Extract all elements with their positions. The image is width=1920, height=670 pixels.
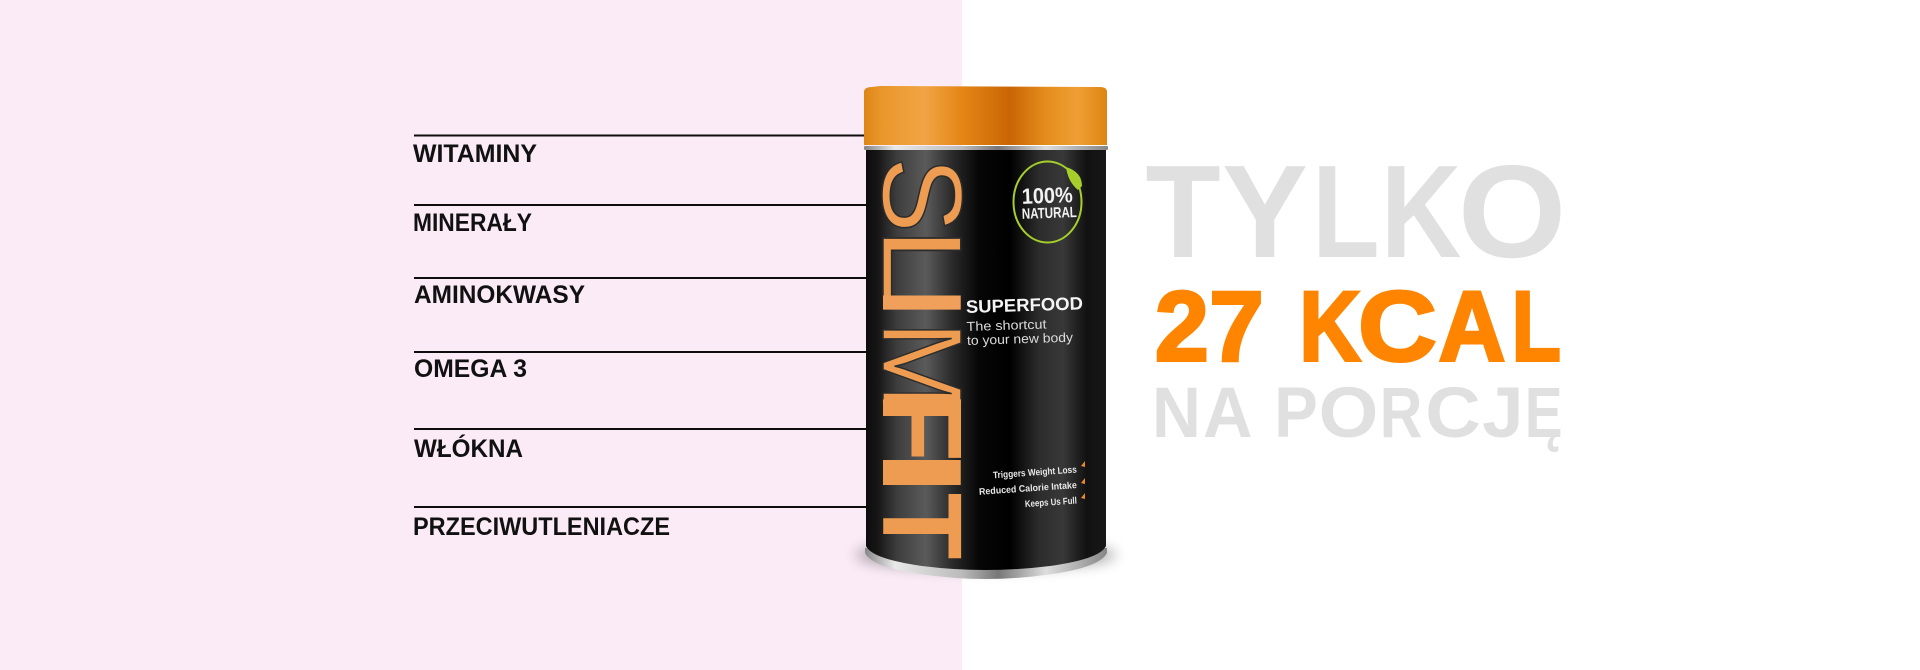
na porcję: A xyxy=(1203,374,1251,453)
na porcję: R xyxy=(1380,374,1422,453)
logo: slimfit: I xyxy=(859,282,985,324)
label: przeciwutleniacze: PRZECIWUTLENIACZE xyxy=(413,513,670,541)
benefits list xyxy=(979,461,1085,510)
27 kcal: 7 xyxy=(1209,270,1264,382)
logo: slimfit: I xyxy=(859,448,985,497)
badge: 100% natural: 100% xyxy=(1021,182,1073,209)
benefits list: Reduced Calorie Intake xyxy=(979,480,1077,498)
tylko: Y xyxy=(1222,138,1308,285)
label: minerały: MINERAŁY xyxy=(413,209,532,237)
ingredient list xyxy=(413,134,866,541)
27 kcal: C xyxy=(1358,270,1437,382)
superfood tagline: SUPERFOOD xyxy=(966,293,1083,317)
can bottom rim xyxy=(865,548,1107,579)
27 kcal: A xyxy=(1438,270,1506,382)
label: włókna: WŁÓKNA xyxy=(414,433,523,463)
27 kcal: 2 xyxy=(1155,270,1209,382)
na porcję: J xyxy=(1482,374,1524,453)
na porcję: N xyxy=(1152,374,1201,453)
label: aminokwasy: AMINOKWASY xyxy=(414,281,585,309)
badge: 100% natural: NATURAL xyxy=(1022,204,1077,223)
superfood tagline xyxy=(966,293,1084,348)
pink background panel xyxy=(0,0,962,670)
tylko: K xyxy=(1381,138,1461,285)
orange lid xyxy=(864,86,1107,145)
27 kcal: K xyxy=(1299,270,1361,382)
tylko: T xyxy=(1145,138,1221,285)
badge: 100% natural xyxy=(1014,162,1082,242)
logo: slimfit: L xyxy=(859,227,985,301)
can shadow xyxy=(856,541,1116,569)
can body xyxy=(866,148,1106,570)
na porcję: C xyxy=(1425,374,1481,453)
logo: slimfit: S xyxy=(859,157,985,233)
tylko: O xyxy=(1458,138,1566,285)
label: omega 3: OMEGA 3 xyxy=(414,355,527,383)
lid rim xyxy=(864,146,1108,150)
na porcję: Ę xyxy=(1525,374,1563,453)
benefits list: Triggers Weight Loss xyxy=(993,465,1077,481)
headline: calorie callout xyxy=(1145,138,1566,453)
superfood tagline: to your new body xyxy=(967,330,1074,348)
logo: slimfit: M xyxy=(859,321,985,411)
label: witaminy: WITAMINY xyxy=(413,140,537,168)
superfood tagline: The shortcut xyxy=(966,316,1047,334)
27 kcal: L xyxy=(1512,270,1561,382)
product can xyxy=(856,86,1116,579)
benefits list: Keeps Us Full xyxy=(1025,496,1077,510)
logo: slimfit: T xyxy=(859,493,985,559)
na porcję: P xyxy=(1274,374,1318,453)
tylko: L xyxy=(1312,138,1380,285)
logo: slimfit: F xyxy=(859,392,985,462)
na porcję: O xyxy=(1319,374,1378,453)
